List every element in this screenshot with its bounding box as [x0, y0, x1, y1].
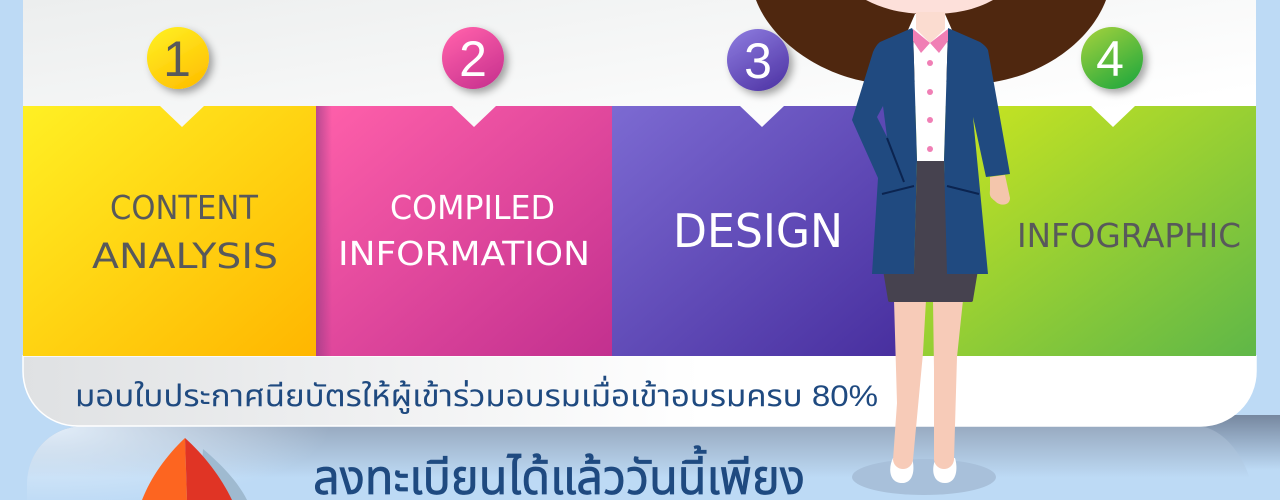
skirt [883, 160, 978, 302]
step 3 label: DESIGN [673, 204, 843, 258]
step 1 label: ANALYSIS [92, 237, 278, 277]
step 3 badge: 3 [744, 33, 772, 89]
certificate text: มอบใบประกาศนียบัตรให้ผู้เข้าร่วมอบรมเมื่อเข้าอบรมครบ 80% [75, 375, 878, 414]
step 1 panel: content analysis [23, 106, 316, 356]
step 4 badge [1081, 27, 1143, 89]
step 4 badge: 4 [1096, 31, 1124, 87]
legs [893, 300, 963, 469]
certificate strip [23, 356, 1256, 426]
ground shadow [852, 459, 996, 495]
step 3 badge [727, 29, 789, 91]
hand [990, 175, 1010, 205]
hair [756, 0, 1106, 82]
collar [913, 29, 948, 53]
icon: sail [142, 438, 247, 500]
floor shadow band [1150, 415, 1280, 470]
pocket lines [882, 138, 979, 194]
step 2 badge [442, 27, 504, 89]
step 1 badge [147, 27, 209, 89]
step 1 label: CONTENT [110, 188, 259, 227]
step 4 label: INFOGRAPHIC [1017, 216, 1241, 255]
shirt [908, 14, 952, 161]
figure: woman in blue jacket [756, 0, 1106, 495]
step 4 panel: infographic [908, 106, 1256, 356]
step 2 label: INFORMATION [338, 234, 590, 273]
step 1 label [92, 188, 278, 277]
step 2 label: COMPILED [390, 188, 555, 227]
step 2 label [338, 188, 590, 273]
panel reflection [27, 426, 1250, 500]
shoes [890, 458, 956, 483]
face [866, 0, 993, 14]
step 1 badge: 1 [163, 31, 191, 87]
step 2 badge: 2 [459, 31, 487, 87]
step 2 panel: compiled information [316, 106, 612, 356]
buttons [927, 60, 933, 152]
step 3 panel: design [612, 106, 908, 356]
jacket [852, 28, 1010, 274]
arm gap [877, 106, 887, 137]
neck [916, 12, 945, 43]
